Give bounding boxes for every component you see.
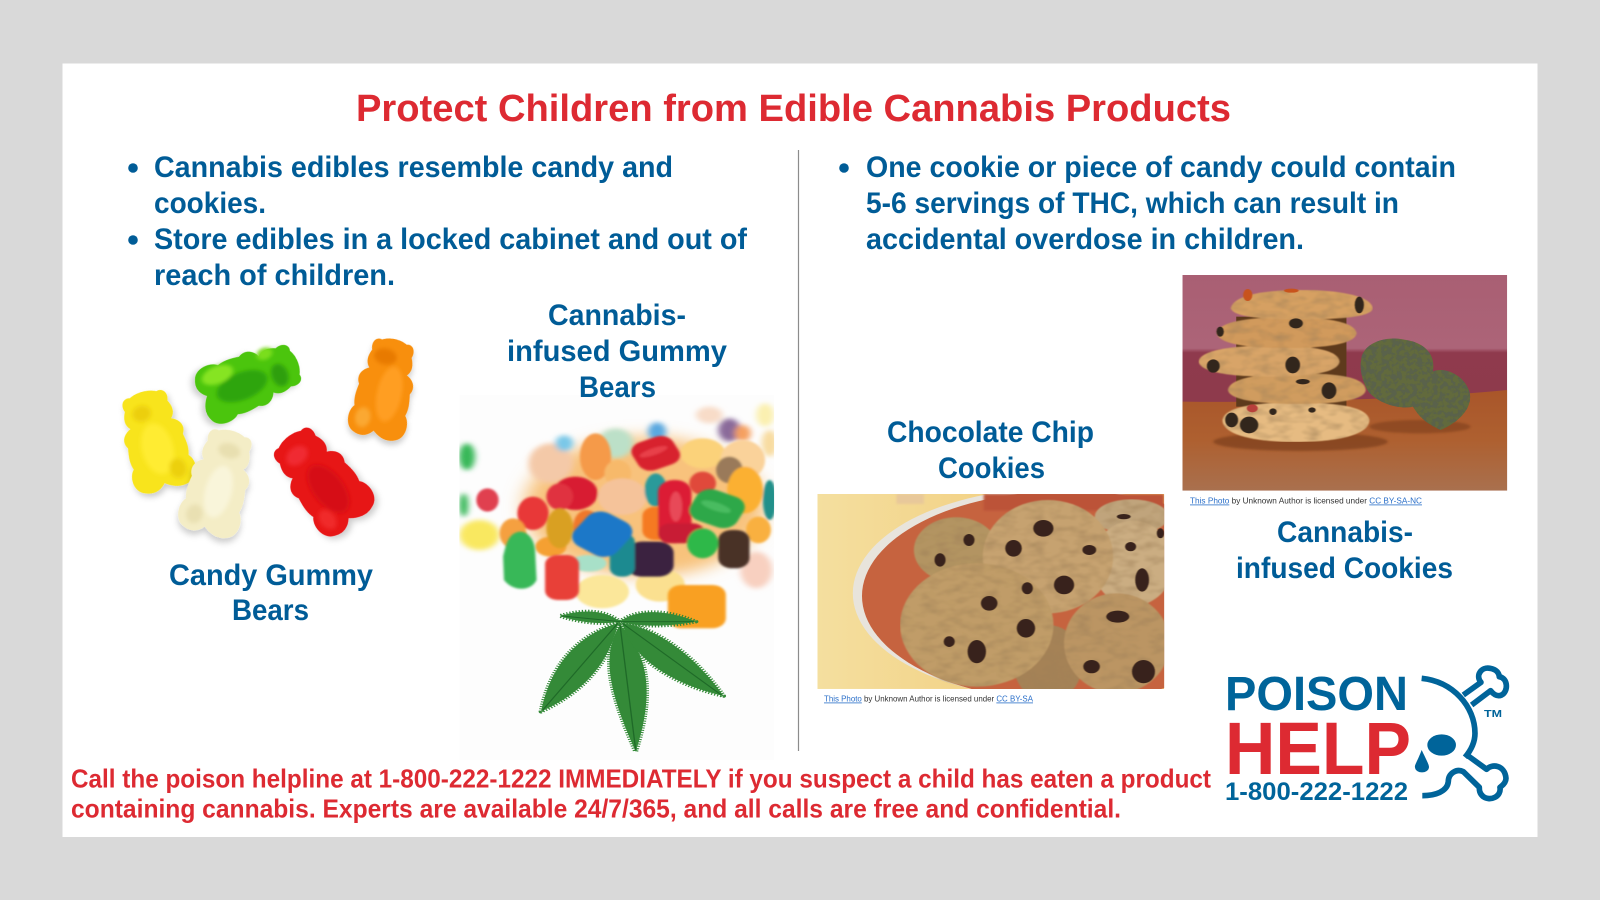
label: cannabis-infused gummy bears: Cannabis- xyxy=(548,299,686,332)
callout: poison helpline message: Call the poison helpline at 1-800-222-1222 IMMEDIATELY if you suspect a child has eaten a product xyxy=(71,764,1211,794)
right bullet list xyxy=(839,151,1456,256)
label: cannabis-infused gummy bears: infused Gummy xyxy=(507,335,727,368)
label: candy gummy bears xyxy=(169,559,373,627)
label: cannabis-infused gummy bears xyxy=(507,299,727,404)
logo: Poison Help xyxy=(1225,668,1506,806)
label: chocolate chip cookies: Cookies xyxy=(938,452,1045,485)
left bullet list: cookies. xyxy=(154,187,266,220)
left bullet list: reach of children. xyxy=(154,259,395,292)
label: candy gummy bears: Candy Gummy xyxy=(169,559,373,592)
image: candy gummy bears xyxy=(111,333,424,543)
logo: Poison Help: TM xyxy=(1484,708,1502,720)
caption: chocolate chip photo credit: This Photo by Unknown Author is licensed under CC BY-SA xyxy=(824,694,1034,704)
label: chocolate chip cookies xyxy=(887,416,1094,485)
image: cannabis-infused gummy bears with leaf xyxy=(459,395,778,760)
label: chocolate chip cookies: Chocolate Chip xyxy=(887,416,1094,449)
left bullet list xyxy=(128,151,748,292)
right bullet list: 5-6 servings of THC, which can result in xyxy=(866,187,1399,220)
label: cannabis-infused cookies xyxy=(1236,516,1453,585)
callout: poison helpline message: containing cannabis. Experts are available 24/7/365, and all calls are free and confidential. xyxy=(71,794,1121,824)
right bullet list: One cookie or piece of candy could contain xyxy=(866,151,1456,184)
title: Protect Children from Edible Cannabis Products xyxy=(356,88,1231,130)
logo: Poison Help: POISON xyxy=(1225,668,1408,721)
image: cannabis-infused cookies xyxy=(1183,275,1507,491)
panel: white card xyxy=(62,64,1538,837)
left bullet list: Store edibles in a locked cabinet and out of xyxy=(154,223,748,256)
callout: poison helpline message xyxy=(71,764,1211,824)
image: chocolate chip cookies xyxy=(818,494,1164,689)
label: candy gummy bears: Bears xyxy=(232,594,309,627)
left bullet list: Cannabis edibles resemble candy and xyxy=(154,151,673,184)
icon: cannabis leaf xyxy=(541,612,724,752)
label: cannabis-infused cookies: Cannabis- xyxy=(1277,516,1413,549)
label: cannabis-infused gummy bears: Bears xyxy=(579,371,656,404)
right bullet list: accidental overdose in children. xyxy=(866,223,1304,256)
icon: skull and crossbones xyxy=(1415,668,1506,799)
caption: cannabis cookie photo credit: This Photo by Unknown Author is licensed under CC BY-SA-NC xyxy=(1190,496,1422,506)
logo: Poison Help: 1-800-222-1222 xyxy=(1225,778,1408,806)
logo: Poison Help: HELP xyxy=(1225,707,1411,790)
label: cannabis-infused cookies: infused Cookies xyxy=(1236,552,1453,585)
